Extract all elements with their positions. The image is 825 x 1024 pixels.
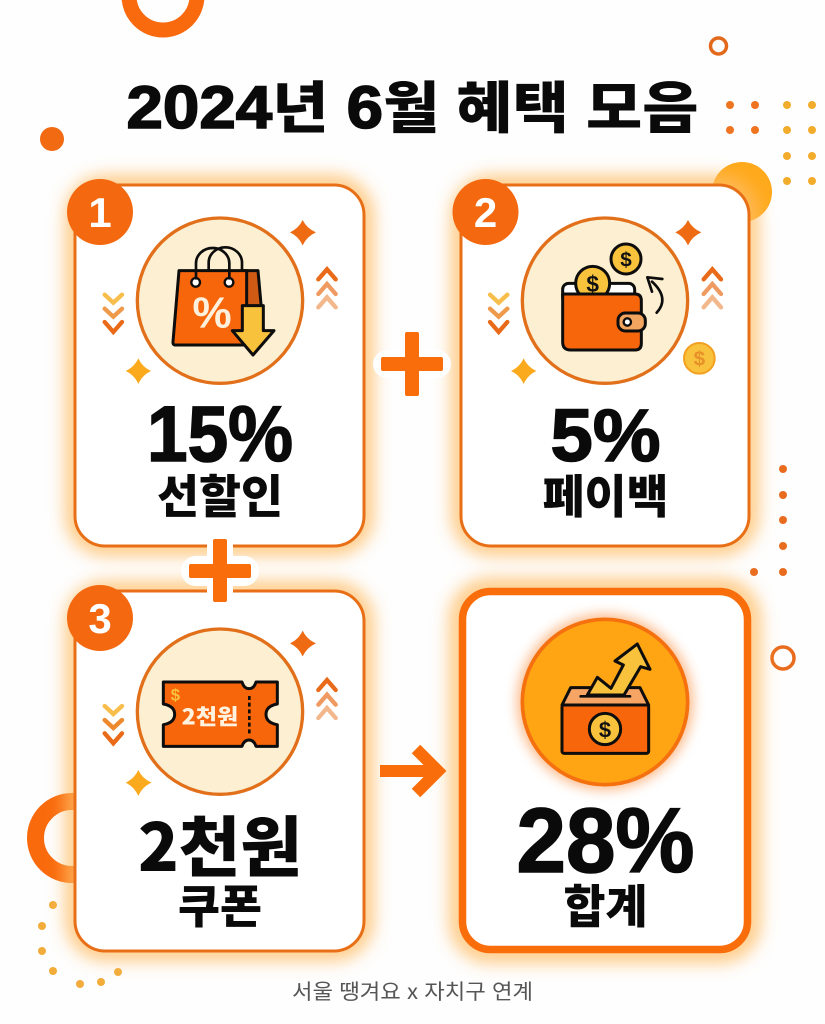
panel: card 4 total	[462, 592, 748, 950]
label: 합계	[564, 871, 648, 937]
circle glow	[517, 614, 693, 790]
icon: shopping bag with discount	[137, 218, 303, 383]
decorative yellow circle	[712, 162, 772, 222]
label: 쿠폰	[178, 871, 262, 937]
badge 1: 1	[88, 189, 112, 236]
sparkles	[511, 220, 701, 384]
decorative dots top right	[726, 101, 816, 185]
badge 2: 2	[474, 189, 497, 236]
icon: wallet with coins: $	[694, 348, 706, 371]
badge 1	[67, 179, 133, 245]
icon: money box with rising arrow	[522, 619, 688, 785]
value: 5%	[550, 394, 660, 477]
label: 선할인	[157, 461, 283, 527]
footer note: 서울 땡겨요 x 자치구 연계	[292, 976, 533, 1006]
panel: card 1 discount	[67, 179, 364, 546]
decorative half ring left	[36, 802, 108, 874]
card glows	[75, 185, 751, 953]
badge 3	[67, 585, 133, 651]
decorative dots right	[750, 465, 787, 576]
decorative small orange circle	[40, 127, 64, 151]
decorative small ring top right	[710, 38, 726, 54]
plus sign down	[181, 537, 259, 604]
plus sign right	[373, 332, 451, 396]
chevrons	[105, 269, 336, 332]
icon: shopping bag with discount: %	[192, 288, 232, 337]
value: 2천원	[138, 795, 302, 891]
value: 15%	[147, 389, 293, 478]
icon: coupon ticket: 2천원	[182, 700, 238, 731]
decorative dots bottom left	[38, 901, 122, 988]
icon: wallet with coins: $	[620, 249, 632, 272]
icon: wallet with coins	[522, 218, 715, 383]
badge 3: 3	[88, 595, 112, 642]
panel: card 3 coupon	[67, 585, 364, 951]
icon: wallet with coins: $	[586, 271, 599, 297]
decorative ring right	[772, 647, 794, 669]
panel: card 2 payback	[452, 179, 749, 546]
icon: coupon ticket: $	[171, 686, 181, 705]
badge 2	[452, 179, 518, 245]
decorative top ring	[129, 0, 197, 30]
label: 페이백	[542, 461, 668, 527]
value: 28%	[516, 790, 694, 892]
chevrons	[490, 269, 721, 332]
chevrons	[105, 680, 336, 743]
sparkles	[126, 631, 316, 796]
icon: money box with rising arrow: $	[599, 717, 611, 742]
sparkles	[126, 220, 316, 384]
title: 2024년 6월 혜택 모음	[126, 64, 698, 145]
icon: coupon ticket	[137, 629, 303, 794]
arrow right	[380, 749, 438, 793]
